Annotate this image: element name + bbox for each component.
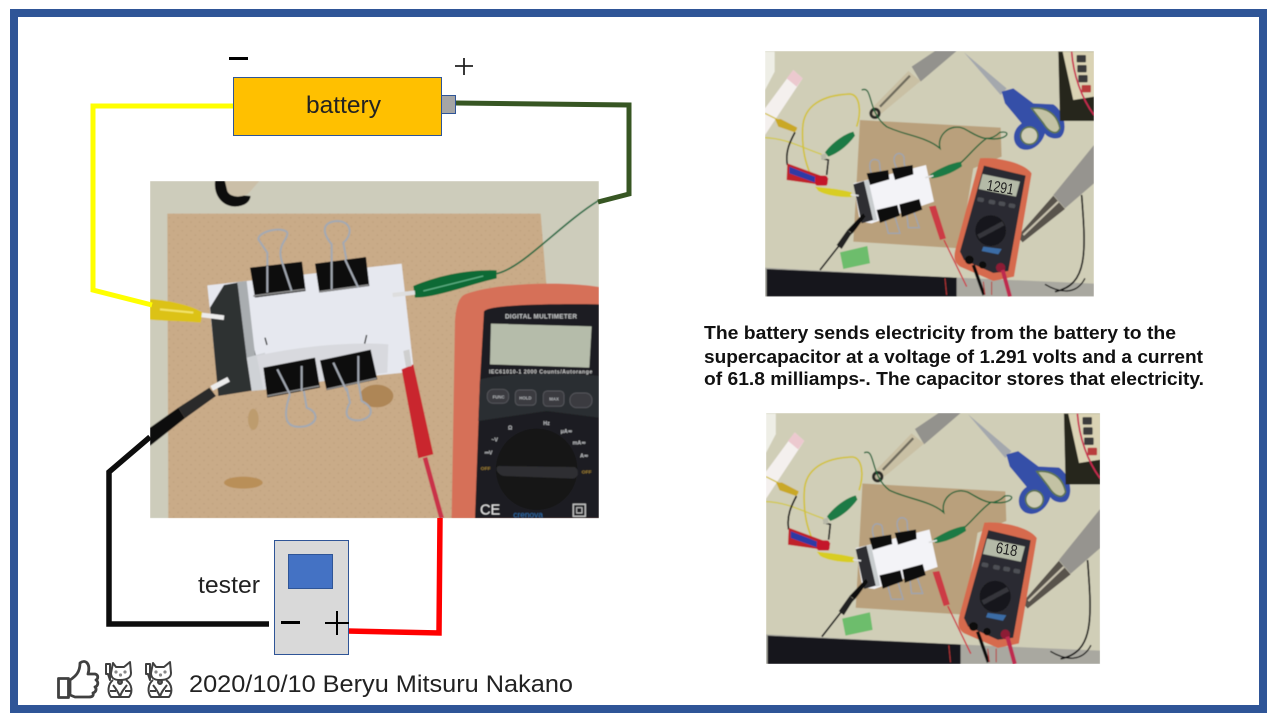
tester label: tester [198,572,260,599]
red probe [402,349,442,518]
main photo: supercapacitor with clips and multimeter [150,181,599,520]
multimeter: Ω [508,426,513,432]
multimeter: OFF [481,466,491,472]
multimeter: IEC61010-1 2000 Counts/Autorange [489,369,592,375]
battery diagram [229,57,473,136]
explanation text: The battery sends electricity from the battery to the [704,323,1176,343]
photo: current measurement 61.8 mA [766,413,1100,664]
tester positive sign [325,611,349,635]
multimeter: A≂ [580,454,588,460]
table caster [215,181,259,207]
multimeter: μA≂ [561,429,572,435]
icon: thumbs up [58,661,98,698]
icon: lucky cat [146,662,171,697]
tester diagram [198,540,349,654]
multimeter: ~V [491,438,498,444]
green alligator clip and wire [393,200,599,298]
multimeter: Hz [543,421,550,427]
explanation text: of 61.8 milliamps-. The capacitor stores that electricity. [704,369,1204,389]
multimeter: crenova [513,510,543,520]
multimeter: OFF [582,469,592,475]
binder clips [250,221,377,427]
black alligator clip [150,379,229,446]
wire: yellow negative lead [93,106,233,305]
wire: red tester lead [347,518,440,633]
negative sign [229,57,248,60]
battery body [234,78,442,136]
multimeter [452,284,599,520]
wire: green positive lead [456,103,629,202]
voltage reading: 1291 [985,177,1015,199]
multimeter: MAX [549,397,559,402]
multimeter: CE [480,502,501,518]
footer credit: 2020/10/10 Beryu Mitsuru Nakano [189,671,573,698]
wire: black tester lead [109,437,269,624]
multimeter: ⎓V [485,450,493,456]
tester body [274,540,348,654]
positive sign [455,58,473,75]
battery label: battery [306,92,381,119]
multimeter: FUNC [493,394,505,399]
multimeter: HOLD [519,396,532,401]
tester negative sign [281,621,300,624]
current reading: 618 [994,540,1019,560]
explanation text [704,323,1204,389]
tester screen [288,554,332,588]
explanation text: supercapacitor at a voltage of 1.291 volts and a current [704,347,1203,367]
multimeter: DIGITAL MULTIMETER [505,313,577,320]
brown paper mat [167,214,547,518]
icon: lucky cat [106,662,131,697]
multimeter: mA≂ [573,440,586,446]
photo: voltage measurement 1.291 V [765,51,1094,297]
yellow alligator clip [150,299,224,323]
battery terminal [442,96,456,114]
white capacitor card [207,264,414,396]
